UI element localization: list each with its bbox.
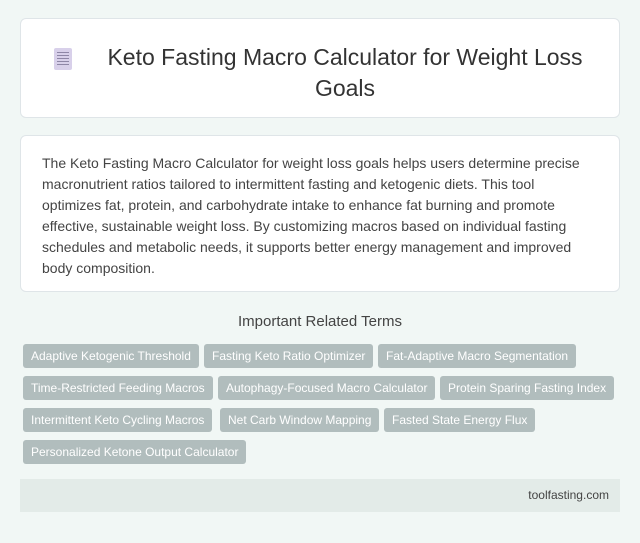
- terms tags: Autophagy-Focused Macro Calculator: [226, 381, 427, 395]
- terms tags: Adaptive Ketogenic Threshold: [31, 349, 191, 363]
- terms tags: Fasting Keto Ratio Optimizer: [212, 349, 365, 363]
- terms tags: Personalized Ketone Output Calculator: [31, 445, 238, 459]
- footer: toolfasting.com: [528, 488, 609, 502]
- description card: [20, 135, 620, 292]
- section heading: Important Related Terms: [238, 313, 402, 330]
- header card: [20, 18, 620, 118]
- title: Keto Fasting Macro Calculator for Weight Loss Goals: [107, 44, 583, 101]
- footer: [20, 479, 620, 512]
- terms tags: Time-Restricted Feeding Macros: [31, 381, 205, 395]
- terms tags: Fasted State Energy Flux: [392, 413, 527, 427]
- terms tags: Net Carb Window Mapping: [228, 413, 371, 427]
- terms tags: Protein Sparing Fasting Index: [448, 381, 606, 395]
- description text: The Keto Fasting Macro Calculator for weight loss goals helps users determine precise macronutrient ratios tailored to intermittent fasting and ketogenic diets. This tool optimizes fat, protein, and carbohydrate intake to enhance fat burning and promote effective, sustainable weight loss. By customizing macros based on individual fasting schedules and metabolic needs, it supports better energy management and improved body composition.: [42, 155, 580, 276]
- terms tags: Fat-Adaptive Macro Segmentation: [386, 349, 568, 363]
- terms tags: Intermittent Keto Cycling Macros: [31, 413, 204, 427]
- icon: receipt: [54, 48, 72, 70]
